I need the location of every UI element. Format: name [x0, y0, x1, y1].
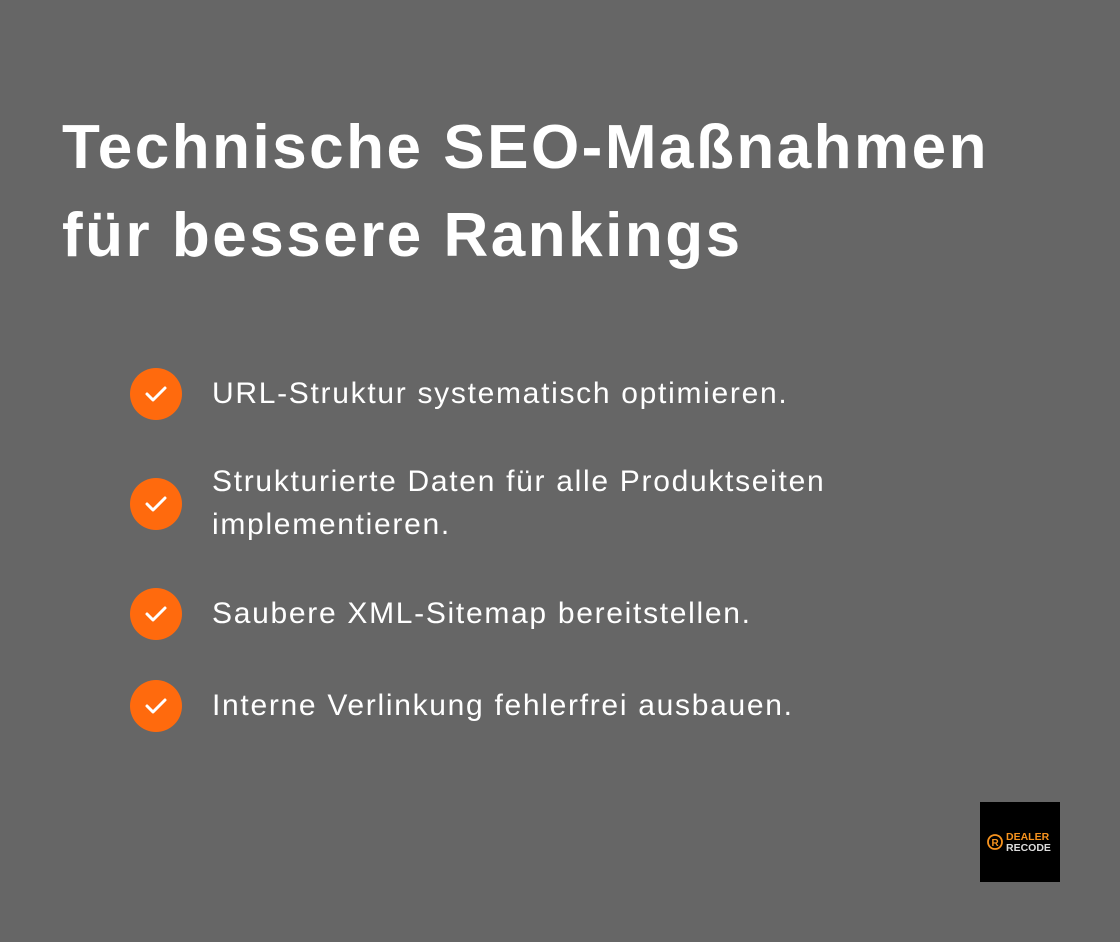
item 4	[130, 680, 794, 732]
item 4: Interne Verlinkung fehlerfrei ausbauen.	[212, 689, 794, 722]
title: für bessere Rankings	[62, 201, 743, 270]
icon: check	[130, 588, 182, 640]
item 3	[130, 588, 752, 640]
icon: check	[130, 478, 182, 530]
logo: RECODE	[1006, 842, 1051, 854]
item 2	[130, 465, 825, 541]
icon: check	[130, 680, 182, 732]
item 2: implementieren.	[212, 508, 451, 541]
logo: R	[992, 838, 1000, 849]
item 2: Strukturierte Daten für alle Produktseiten	[212, 465, 825, 498]
title	[62, 113, 989, 270]
item 1	[130, 368, 788, 420]
icon: check	[130, 368, 182, 420]
logo: DEALER	[1006, 831, 1050, 843]
item 1: URL-Struktur systematisch optimieren.	[212, 377, 788, 410]
logo	[980, 802, 1060, 882]
item 3: Saubere XML-Sitemap bereitstellen.	[212, 597, 752, 630]
title: Technische SEO-Maßnahmen	[62, 113, 989, 182]
